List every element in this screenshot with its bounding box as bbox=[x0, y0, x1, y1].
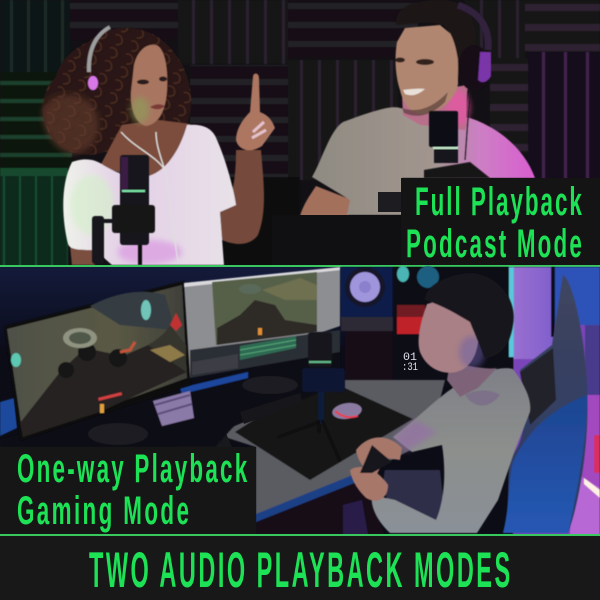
back wall and light bbox=[513, 267, 600, 535]
microphone bbox=[424, 111, 490, 178]
audio interface bbox=[240, 393, 302, 424]
hair bbox=[43, 28, 191, 155]
desk bbox=[215, 380, 445, 535]
neck bbox=[402, 85, 468, 130]
heading: One-way Playback: One-way Playback bbox=[17, 446, 248, 491]
gaming pc tower bbox=[393, 266, 514, 387]
hair bbox=[425, 273, 514, 358]
man with headphones bbox=[300, 0, 535, 216]
arm raised bbox=[220, 150, 264, 244]
face bbox=[419, 295, 479, 373]
monitor shelf and treasure chest bbox=[0, 345, 340, 447]
clock display: 01 bbox=[403, 352, 417, 364]
laptop and boom arm bbox=[272, 192, 402, 266]
tripod microphone bbox=[278, 332, 345, 461]
face bbox=[131, 45, 167, 126]
hand and finger bbox=[236, 74, 275, 150]
man with controller bbox=[350, 273, 530, 533]
heading: Full Playback: Full Playback bbox=[415, 179, 583, 224]
woman with headphones bbox=[42, 27, 275, 265]
divider line bbox=[0, 534, 600, 536]
neck bbox=[447, 362, 497, 397]
shirt bbox=[312, 107, 535, 215]
lap bbox=[384, 470, 447, 533]
hair bbox=[396, 0, 476, 60]
heading: Gaming Mode: Gaming Mode bbox=[17, 488, 189, 533]
hands and controller bbox=[356, 437, 402, 478]
footer title band bbox=[0, 536, 600, 600]
headband and ear cup bbox=[89, 27, 110, 72]
clock display bbox=[402, 352, 418, 374]
right monitor bbox=[184, 267, 340, 378]
divider line bbox=[0, 265, 600, 267]
desk mat bbox=[235, 388, 413, 480]
left arm bbox=[300, 186, 352, 216]
photo: podcast mode bbox=[0, 0, 600, 266]
clock display: :31 bbox=[402, 362, 418, 374]
heading: Podcast Mode: Podcast Mode bbox=[406, 221, 582, 266]
studio monitor speaker bbox=[341, 267, 396, 383]
gaming chair bbox=[503, 275, 588, 533]
photo: gaming mode bbox=[0, 266, 600, 535]
caption panel: gaming mode bbox=[0, 446, 256, 534]
face bbox=[396, 25, 458, 114]
left monitor bbox=[4, 281, 191, 441]
neck and chest bbox=[100, 120, 190, 182]
caption panel: podcast mode bbox=[401, 178, 600, 266]
earbud cable bbox=[121, 132, 178, 262]
main title: TWO AUDIO PLAYBACK MODES bbox=[89, 543, 510, 599]
keyboard bbox=[178, 431, 232, 447]
shirt bbox=[63, 125, 236, 265]
microphone on stand bbox=[92, 155, 155, 265]
acoustic foam wall bbox=[0, 0, 600, 266]
torso and arms bbox=[372, 368, 530, 533]
RGB mouse bbox=[331, 401, 363, 421]
headphones bbox=[458, 5, 488, 50]
